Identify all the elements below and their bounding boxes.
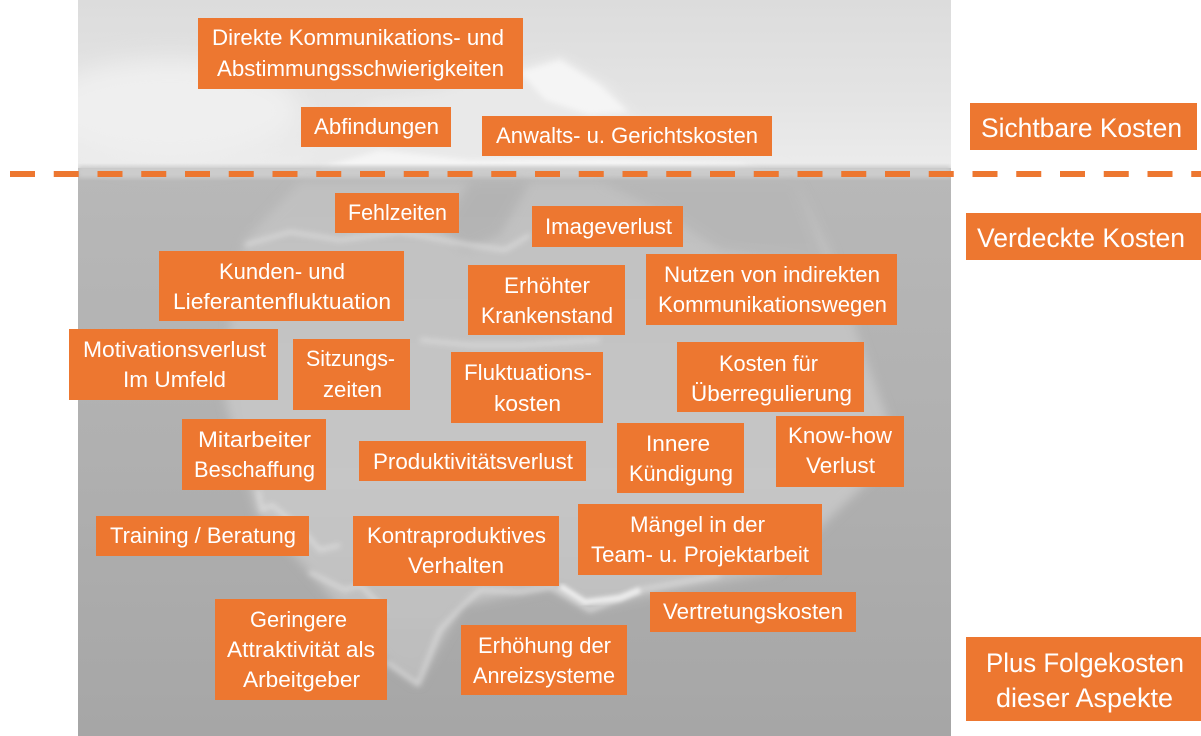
box: Mängel in der Team- u. Projektarbeit: Mängel in der <box>630 512 765 537</box>
box: Abfindungen <box>301 107 451 147</box>
box: Erhöhter Krankenstand <box>468 265 625 335</box>
box: Direkte Kommunikations- und Abstimmungsschwierigkeiten: Direkte Kommunikations- und <box>212 25 504 50</box>
box: Motivationsverlust Im Umfeld <box>69 329 278 400</box>
box: Fluktuationskosten: kosten <box>494 391 561 416</box>
box: Mitarbeiter Beschaffung: Mitarbeiter <box>198 427 311 452</box>
dashed water line <box>10 171 1201 177</box>
box: Geringere Attraktivität als Arbeitgeber: Attraktivität als <box>227 637 375 662</box>
box: Kosten für Überregulierung <box>677 342 864 412</box>
box: Training / Beratung <box>96 516 309 556</box>
box: Fehlzeiten <box>335 193 459 233</box>
box: Mängel in der Team- u. Projektarbeit: Team- u. Projektarbeit <box>591 542 809 567</box>
box: Direkte Kommunikations- und Abstimmungsschwierigkeiten <box>198 18 523 89</box>
box: Kunden- und Lieferantenfluktuation: Lieferantenfluktuation <box>173 289 391 314</box>
box: Anwalts- u. Gerichtskosten <box>482 116 772 156</box>
box: Know-how Verlust: Know-how <box>788 423 892 448</box>
box: Imageverlust: Imageverlust <box>545 214 672 239</box>
box: Erhöhung der Anreizsysteme <box>461 625 627 695</box>
box: Sitzungszeiten <box>293 339 410 410</box>
box: Motivationsverlust Im Umfeld: Im Umfeld <box>123 367 226 392</box>
box: Mitarbeiter Beschaffung <box>182 419 326 490</box>
box: Sitzungszeiten: Sitzungs- <box>306 346 395 371</box>
side label: Verdeckte Kosten <box>966 213 1201 260</box>
box: Fluktuationskosten <box>451 352 603 423</box>
box: Kosten für Überregulierung: Überregulierung <box>691 381 852 406</box>
box: Kontraproduktives Verhalten: Verhalten <box>408 553 504 578</box>
box: Training / Beratung: Training / Beratung <box>110 523 296 548</box>
box: Nutzen von indirekten Kommunikationswegen: Kommunikationswegen <box>658 292 887 317</box>
box: Motivationsverlust Im Umfeld: Motivationsverlust <box>83 337 266 362</box>
background: iceberg photo <box>40 0 951 736</box>
box: Erhöhung der Anreizsysteme: Anreizsysteme <box>473 663 615 688</box>
box: Vertretungskosten <box>650 592 856 632</box>
box: Erhöhter Krankenstand: Krankenstand <box>481 303 613 328</box>
box: Know-how Verlust <box>776 416 904 487</box>
box: Abfindungen: Abfindungen <box>314 114 439 139</box>
box: Vertretungskosten: Vertretungskosten <box>663 599 843 624</box>
box: Mitarbeiter Beschaffung: Beschaffung <box>194 457 315 482</box>
box: Kunden- und Lieferantenfluktuation <box>159 251 404 321</box>
box: Kontraproduktives Verhalten: Kontraproduktives <box>367 523 546 548</box>
box: Nutzen von indirekten Kommunikationswegen <box>646 254 897 325</box>
box: Nutzen von indirekten Kommunikationswegen: Nutzen von indirekten <box>664 262 880 287</box>
box: Erhöhter Krankenstand: Erhöhter <box>504 273 590 298</box>
box: Imageverlust <box>532 206 683 247</box>
side label: Plus Folgekosten dieser Aspekte: dieser Aspekte <box>996 683 1173 713</box>
box: Erhöhung der Anreizsysteme: Erhöhung der <box>478 633 611 658</box>
box: Sitzungszeiten: zeiten <box>323 377 382 402</box>
box: Kosten für Überregulierung: Kosten für <box>719 351 818 376</box>
box: Innere Kündigung: Kündigung <box>629 461 733 486</box>
box: Geringere Attraktivität als Arbeitgeber <box>215 599 387 700</box>
box: Innere Kündigung: Innere <box>646 431 710 456</box>
box: Kontraproduktives Verhalten <box>353 516 559 586</box>
box: Innere Kündigung <box>617 423 744 493</box>
box: Fehlzeiten: Fehlzeiten <box>348 200 447 225</box>
box: Geringere Attraktivität als Arbeitgeber: Arbeitgeber <box>243 667 360 692</box>
box: Produktivitätsverlust: Produktivitätsverlust <box>373 449 573 474</box>
box: Know-how Verlust: Verlust <box>806 453 875 478</box>
side label: Sichtbare Kosten: Sichtbare Kosten <box>981 113 1182 143</box>
box: Kunden- und Lieferantenfluktuation: Kunden- und <box>219 259 345 284</box>
box: Anwalts- u. Gerichtskosten: Anwalts- u. Gerichtskosten <box>496 123 758 148</box>
side label: Plus Folgekosten dieser Aspekte <box>966 637 1201 721</box>
box: Mängel in der Team- u. Projektarbeit <box>578 504 822 575</box>
box: Fluktuationskosten: Fluktuations- <box>464 360 592 385</box>
side label: Sichtbare Kosten <box>970 103 1197 150</box>
box: Geringere Attraktivität als Arbeitgeber: Geringere <box>250 607 347 632</box>
side label: Verdeckte Kosten: Verdeckte Kosten <box>977 223 1185 253</box>
box: Produktivitätsverlust <box>359 441 586 481</box>
box: Direkte Kommunikations- und Abstimmungsschwierigkeiten: Abstimmungsschwierigkeiten <box>217 56 504 81</box>
side label: Plus Folgekosten dieser Aspekte: Plus Folgekosten <box>986 648 1184 678</box>
